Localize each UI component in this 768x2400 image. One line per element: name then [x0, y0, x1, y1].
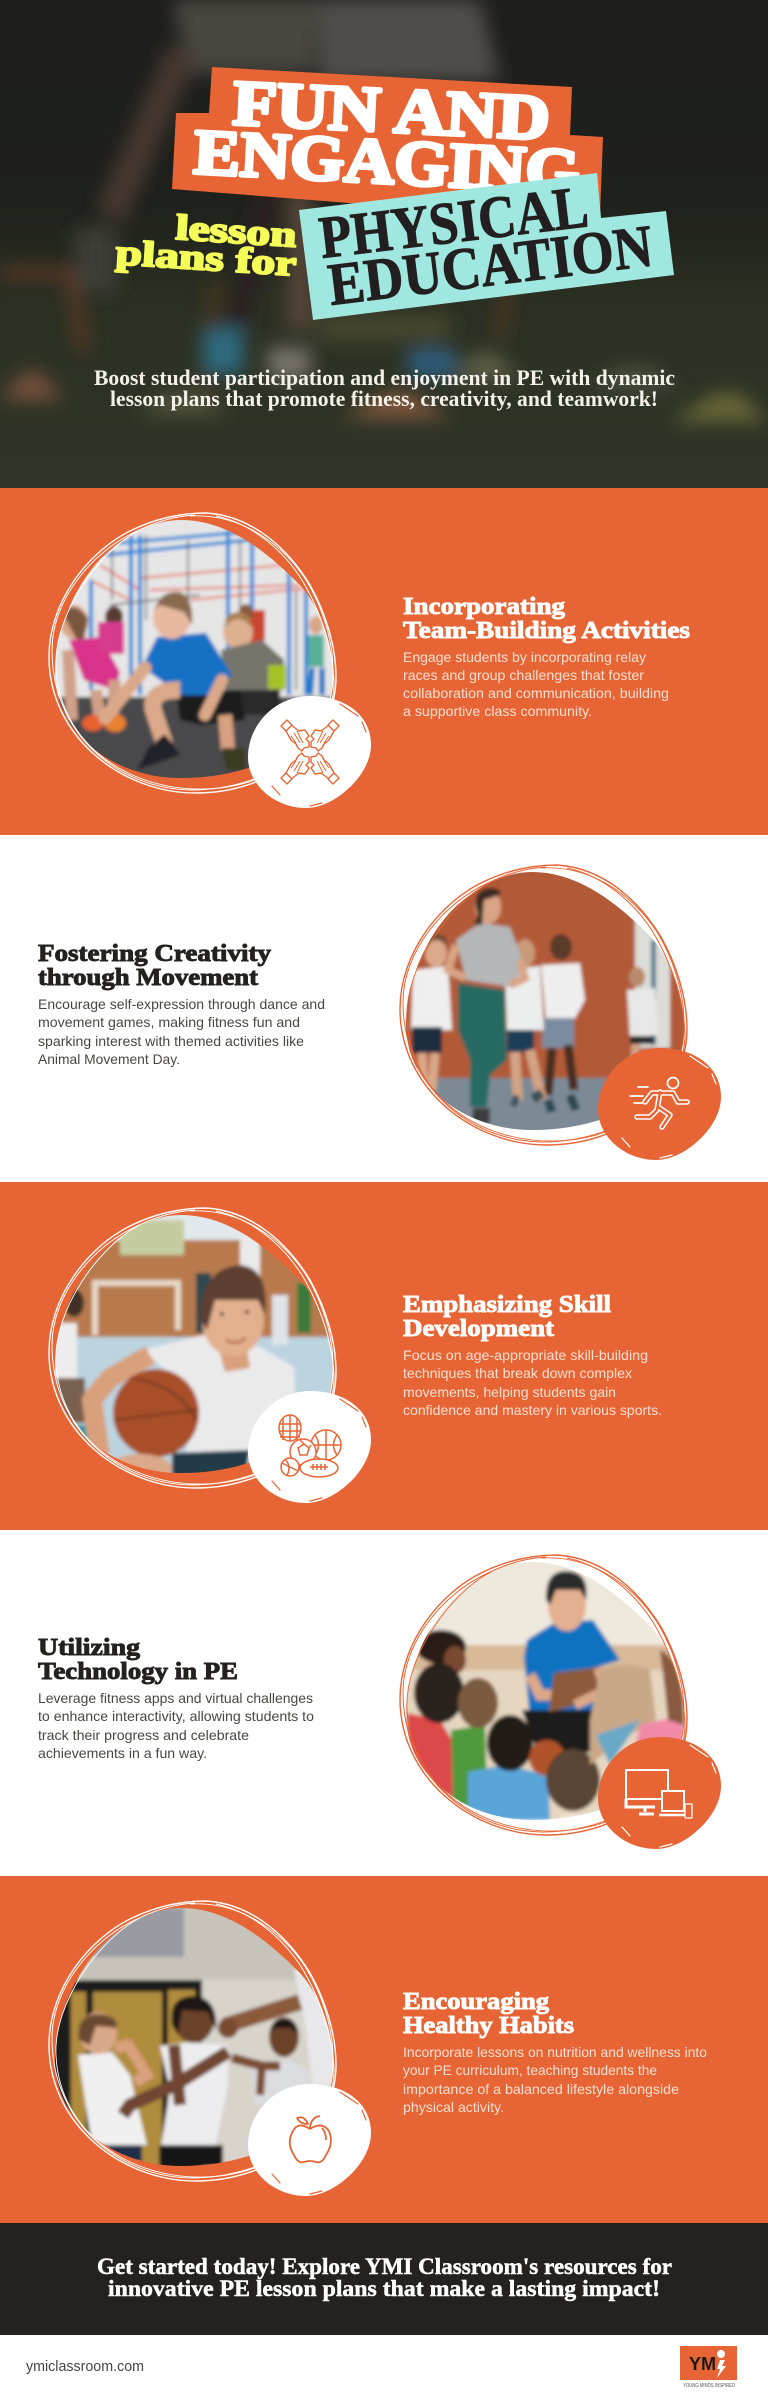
body text: a supportive class community. — [403, 703, 592, 719]
body text: Animal Movement Day. — [38, 1051, 180, 1067]
title text: Fun and Engaging: ENGAGING — [192, 116, 581, 207]
body text: sparking interest with themed activities like — [38, 1033, 304, 1049]
photo: teacher jogging with students — [406, 872, 684, 1130]
heading: Utilizing — [38, 1635, 140, 1661]
body text: techniques that break down complex — [403, 1365, 632, 1381]
subtitle: lesson plans for: lesson — [174, 207, 298, 255]
call-to-action text: Get started today! Explore YMI Classroom's resources for — [97, 2254, 672, 2279]
panel: healthy habits — [0, 1876, 768, 2223]
body text: physical activity. — [403, 2099, 504, 2115]
heading: Team-Building Activities — [403, 618, 690, 644]
body text: Focus on age-appropriate skill-building — [403, 1347, 648, 1363]
photo: kids squatting in gym — [55, 520, 333, 778]
title text: Fun and Engaging — [192, 67, 581, 207]
hero background photo — [0, 0, 768, 488]
heading: Development — [403, 1316, 554, 1342]
icon badge: devices — [598, 1737, 721, 1849]
intro text — [94, 365, 675, 411]
intro text: lesson plans that promote fitness, creativity, and teamwork! — [110, 386, 658, 411]
decorative hand-drawn ring — [49, 1208, 336, 1488]
panel: skill development — [0, 1182, 768, 1530]
title text: Fun and Engaging: FUN AND — [231, 67, 551, 153]
body text: races and group challenges that foster — [403, 667, 644, 683]
icon: sports balls — [279, 1415, 341, 1477]
photo: children stretching — [55, 1908, 333, 2166]
heading: Healthy Habits — [403, 2013, 574, 2039]
heading: Incorporating — [403, 594, 565, 620]
panel: creativity through movement — [38, 864, 721, 1160]
icon badge: apple — [248, 2084, 371, 2196]
body text: confidence and mastery in various sports. — [403, 1402, 662, 1418]
heading: through Movement — [38, 965, 258, 991]
decorative hand-drawn ring — [400, 865, 687, 1145]
icon badge: teamwork hands — [248, 696, 371, 808]
title text: Physical Education: PHYSICAL — [316, 173, 592, 271]
body text — [403, 1347, 662, 1418]
icon: runner — [630, 1078, 687, 1127]
panel: technology in PE — [38, 1554, 721, 1849]
icon badge: sports balls — [248, 1391, 371, 1503]
heading: Technology in PE — [38, 1659, 238, 1685]
title banner: orange — [172, 67, 603, 215]
body text: Incorporate lessons on nutrition and wellness into — [403, 2044, 707, 2060]
icon: puzzle hands — [281, 720, 339, 784]
decorative hand-drawn ring — [400, 1555, 687, 1835]
body text: to enhance interactivity, allowing students to — [38, 1708, 314, 1724]
panel: call to action — [0, 2223, 768, 2335]
body text: Leverage fitness apps and virtual challenges — [38, 1690, 313, 1706]
panel: team-building activities — [0, 488, 768, 835]
icon badge: running figure — [598, 1048, 721, 1160]
logo: YMI — [680, 2346, 737, 2389]
body text: your PE curriculum, teaching students the — [403, 2062, 657, 2078]
body text — [38, 996, 325, 1067]
body text: importance of a balanced lifestyle alongside — [403, 2081, 679, 2097]
heading: Encouraging — [403, 1989, 549, 2015]
body text: collaboration and communication, building — [403, 685, 669, 701]
photo: boy with basketball — [55, 1215, 333, 1473]
subtitle: lesson plans for: plans for — [114, 232, 298, 284]
heading: Emphasizing Skill — [403, 1292, 611, 1318]
panel: hero header — [0, 0, 768, 488]
title text: Physical Education — [316, 173, 656, 318]
photo: teacher with students and clipboard — [406, 1562, 684, 1820]
decorative hand-drawn ring — [49, 513, 336, 793]
logo: YMI: YM — [689, 2354, 716, 2374]
body text: Encourage self-expression through dance and — [38, 996, 325, 1012]
heading: Fostering Creativity — [38, 941, 271, 967]
body text — [403, 2044, 707, 2115]
body text: track their progress and celebrate — [38, 1727, 249, 1743]
intro text: Boost student participation and enjoyment in PE with dynamic — [94, 365, 675, 390]
decorative hand-drawn ring — [49, 1901, 336, 2181]
heading — [38, 1635, 238, 1685]
icon: apple — [290, 2116, 331, 2162]
body text: movements, helping students gain — [403, 1384, 616, 1400]
body text — [403, 649, 669, 719]
body text: Engage students by incorporating relay — [403, 649, 646, 665]
title text: Physical Education: EDUCATION — [325, 213, 656, 318]
website url: ymiclassroom.com — [26, 2358, 144, 2375]
icon: computer, laptop, phone — [626, 1770, 692, 1818]
title banner: teal — [299, 173, 674, 320]
heading — [403, 1292, 611, 1342]
call-to-action text — [97, 2254, 672, 2301]
call-to-action text: innovative PE lesson plans that make a lasting impact! — [108, 2276, 660, 2301]
subtitle: lesson plans for — [114, 207, 298, 284]
heading — [403, 1989, 574, 2039]
heading — [38, 941, 271, 991]
body text: movement games, making fitness fun and — [38, 1014, 300, 1030]
heading — [403, 594, 690, 644]
body text: achievements in a fun way. — [38, 1745, 207, 1761]
logo: YMI: YOUNG MINDS INSPIRED — [683, 2383, 735, 2389]
panel: footer — [0, 2335, 768, 2400]
body text — [38, 1690, 314, 1761]
